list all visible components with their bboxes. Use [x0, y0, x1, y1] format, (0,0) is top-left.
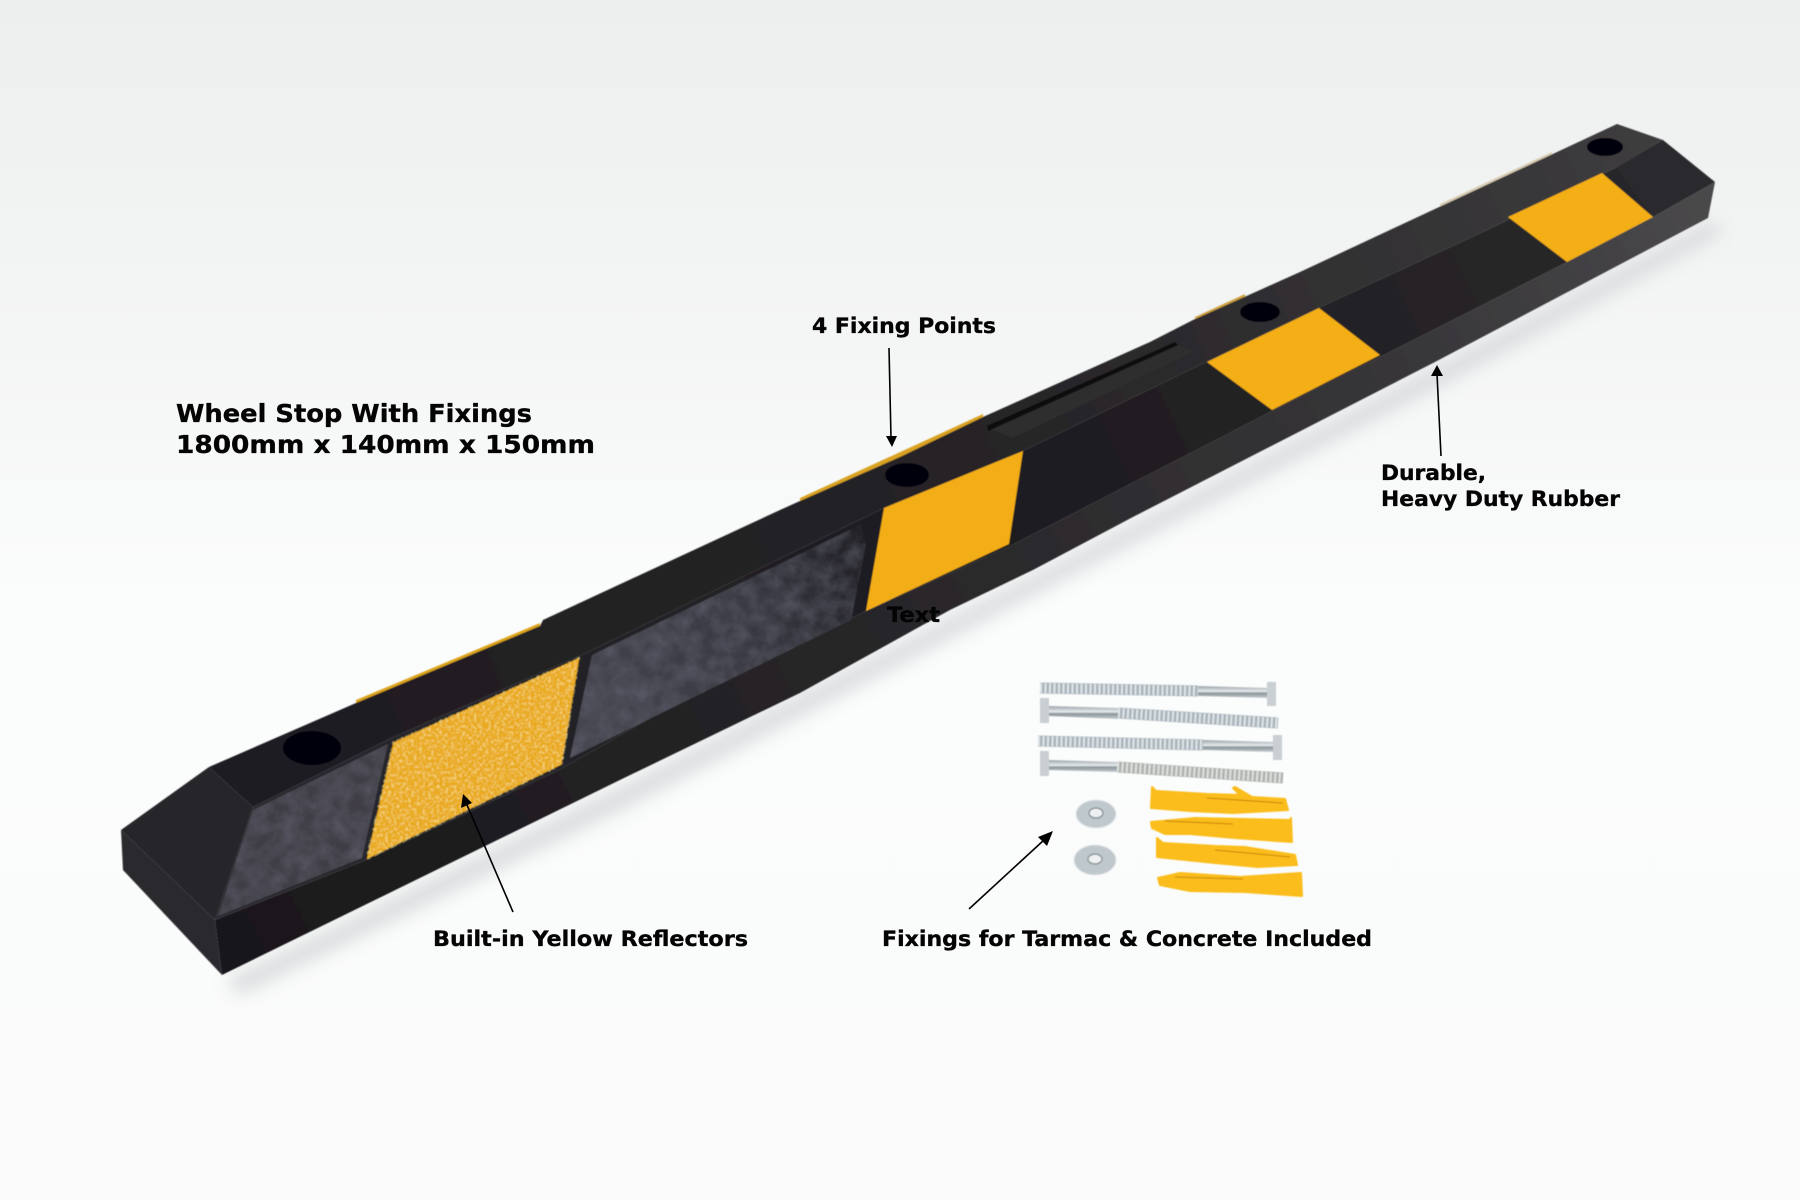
- wall plugs: [1151, 787, 1302, 896]
- title: [176, 399, 595, 459]
- product: rubber wheel stop: [121, 124, 1722, 995]
- yellow strips behind back edge: [356, 152, 1552, 707]
- slot line: [987, 342, 1178, 431]
- reflector 3: [1207, 308, 1380, 410]
- arrow: fixing points: [886, 348, 897, 447]
- plug slits: [1165, 798, 1290, 879]
- mottled panel left of reflector 1: [218, 744, 388, 916]
- washers: [1074, 800, 1116, 875]
- label: 4 fixing points: 4 Fixing Points: [812, 314, 996, 338]
- label: durable rubber: Heavy Duty Rubber: [1381, 487, 1621, 511]
- arrow: durable rubber: [1431, 365, 1443, 456]
- title: 1800mm x 140mm x 150mm: [176, 430, 595, 459]
- screws: [1038, 682, 1283, 778]
- shadow under wheel stop: [225, 222, 1722, 995]
- arrow: fixings: [969, 831, 1053, 909]
- right sloped end: [1617, 140, 1715, 217]
- arrow: reflectors: [461, 794, 513, 912]
- bottom side face: [215, 182, 1715, 975]
- reflector 4: [1508, 173, 1653, 262]
- mottled panel between reflectors 1 and 2: [570, 525, 866, 758]
- label: fixings: Fixings for Tarmac & Concrete Included: [882, 927, 1372, 951]
- title: Wheel Stop With Fixings: [176, 399, 532, 428]
- label: durable rubber: Durable,: [1381, 461, 1486, 485]
- left sloped end: [121, 767, 253, 920]
- fixing holes: [283, 138, 1623, 765]
- recessed slot panel: [987, 343, 1193, 438]
- fixings: screws, washers, wall plugs: [1038, 682, 1302, 896]
- label: text placeholder: Text: [887, 603, 940, 627]
- top face: [209, 124, 1663, 807]
- label: durable rubber: [1381, 461, 1621, 511]
- sloped front face: [215, 140, 1663, 920]
- reflector 2: [866, 451, 1023, 611]
- left end face: [121, 830, 222, 975]
- label: reflectors: Built-in Yellow Reflectors: [433, 927, 748, 951]
- reflector 1: [366, 657, 580, 860]
